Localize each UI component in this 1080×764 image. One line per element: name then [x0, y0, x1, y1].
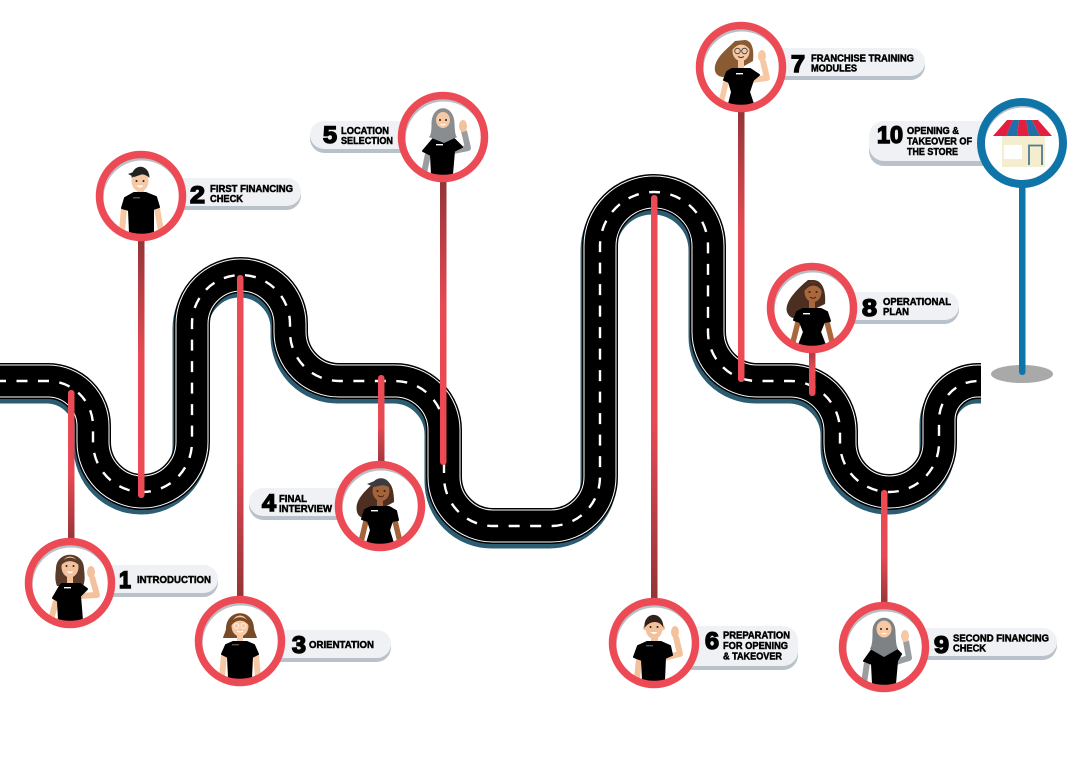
pin line 4: [378, 375, 384, 470]
icon: store: [993, 120, 1052, 167]
label 9: [953, 632, 1049, 654]
pill 2: [141, 178, 301, 210]
label 7: FRANCHISE TRAINING: [811, 52, 914, 64]
sign disc: [981, 102, 1063, 184]
label 7: [811, 52, 914, 74]
pill 6: [654, 626, 798, 670]
label 4: FINAL: [279, 493, 308, 505]
avatar 1: [29, 542, 111, 624]
label 3: ORIENTATION: [309, 639, 374, 651]
label 6: FOR OPENING: [723, 640, 788, 652]
number 6: 6: [705, 628, 719, 655]
pin line 2: [138, 235, 144, 498]
avatar 8: [771, 267, 853, 350]
road: [0, 192, 990, 530]
label 9: CHECK: [953, 642, 986, 654]
pin line 8: [809, 345, 816, 396]
label 4: [279, 493, 332, 515]
pill 3: [240, 630, 391, 662]
label 1: INTRODUCTION: [137, 574, 211, 586]
signpost base: [991, 365, 1053, 383]
avatar 7: [700, 26, 782, 108]
step 10: opening and takeover of the store: [869, 102, 1063, 383]
avatar 3: [199, 600, 281, 682]
avatar 4: [339, 465, 421, 548]
step 4: final interview: [249, 375, 422, 548]
label 8: [883, 296, 952, 318]
pin line 3: [237, 275, 244, 605]
ring 2: [100, 154, 182, 238]
ring 10: [981, 102, 1063, 184]
pill 1: [70, 565, 218, 597]
ring 7: [700, 26, 782, 108]
pin line 1: [68, 390, 74, 545]
label 8: OPERATIONAL: [883, 296, 952, 308]
label 9: SECOND FINANCING: [953, 632, 1049, 644]
number 1: 1: [119, 567, 131, 594]
number 3: 3: [292, 632, 306, 659]
step 6: preparation for opening and takeover: [612, 195, 798, 684]
pin line 6: [651, 195, 658, 607]
label 5: [341, 125, 393, 147]
number 4: 4: [262, 490, 277, 517]
label 2: [210, 183, 293, 205]
pill 7: [741, 48, 925, 80]
ring 9: [842, 606, 926, 688]
label 7: MODULES: [811, 62, 857, 74]
pill 8: [812, 292, 959, 324]
step 2: first financing check: [100, 154, 301, 498]
label 2: CHECK: [210, 193, 243, 205]
number 2: 2: [190, 182, 205, 209]
step 9: second financing check: [842, 490, 1057, 688]
number 8: 8: [862, 295, 877, 322]
step 8: operational plan: [770, 266, 959, 396]
label 5: LOCATION: [341, 125, 389, 137]
ring 1: [28, 542, 112, 624]
number 5: 5: [323, 122, 337, 149]
label 6: PREPARATION: [723, 630, 790, 642]
ring 4: [338, 464, 422, 548]
pill 10: [869, 121, 1022, 166]
avatar 9: [843, 606, 925, 688]
label 2: FIRST FINANCING: [210, 183, 293, 195]
avatar 2: [100, 155, 182, 238]
pill 4: [249, 488, 380, 520]
number 10: 10: [877, 122, 903, 149]
step 5: location selection: [310, 96, 484, 465]
label 5: SELECTION: [341, 135, 393, 147]
pin line 7: [738, 105, 744, 382]
label 10: OPENING &: [907, 125, 959, 137]
step 7: franchise training modules: [700, 26, 925, 382]
pill 9: [884, 628, 1057, 660]
pill 5: [310, 121, 443, 153]
step 3: orientation: [198, 275, 391, 682]
number 7: 7: [791, 51, 805, 78]
signpost pole: [1019, 180, 1026, 375]
pin line 9: [881, 490, 888, 610]
step 1: introduction: [28, 390, 218, 624]
ring 8: [770, 266, 854, 350]
label 4: INTERVIEW: [279, 503, 332, 515]
avatar 5: [402, 96, 484, 178]
avatar 6: [613, 602, 695, 684]
label 10: THE STORE: [907, 146, 958, 158]
label 6: [723, 630, 790, 662]
ring 5: [402, 96, 484, 178]
label 10: [907, 125, 973, 158]
ring 6: [612, 602, 696, 684]
label 8: PLAN: [883, 306, 909, 318]
pin line 5: [440, 175, 446, 465]
label 10: TAKEOVER OF: [907, 136, 973, 148]
ring 3: [198, 600, 282, 682]
number 9: 9: [934, 632, 949, 659]
label 6: & TAKEOVER: [723, 650, 782, 662]
